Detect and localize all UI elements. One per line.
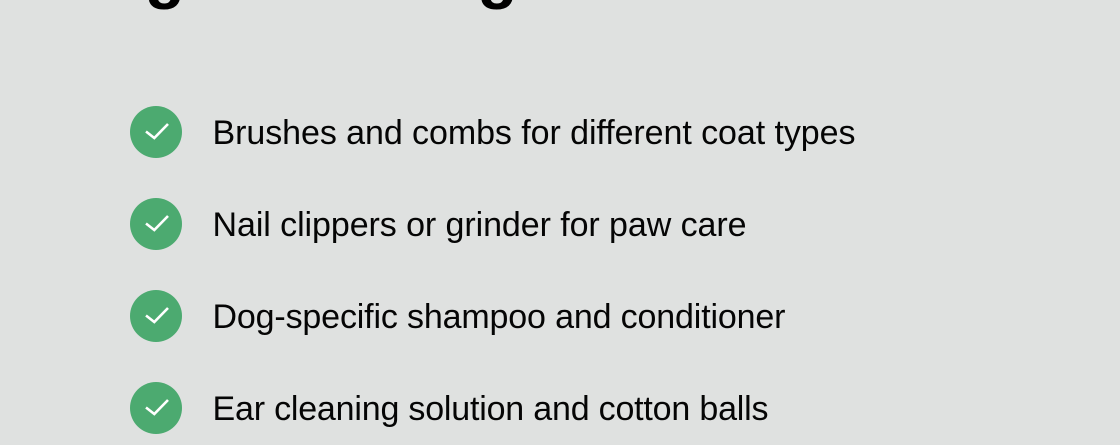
icon: green check circle [130,198,182,250]
item text: Nail clippers or grinder for paw care [212,206,746,244]
icon: green check circle [130,290,182,342]
icon: green check circle [130,382,182,434]
list item: nail clippers [130,198,746,250]
item text: Dog-specific shampoo and conditioner [212,298,786,336]
item text: Brushes and combs for different coat types [212,114,856,152]
icon: green check circle [130,106,182,158]
item text: Ear cleaning solution and cotton balls [212,390,768,428]
list item: shampoo and conditioner [130,290,786,342]
checklist [130,106,856,434]
list item: brushes and combs [130,106,856,158]
list item: ear cleaning [130,382,768,434]
